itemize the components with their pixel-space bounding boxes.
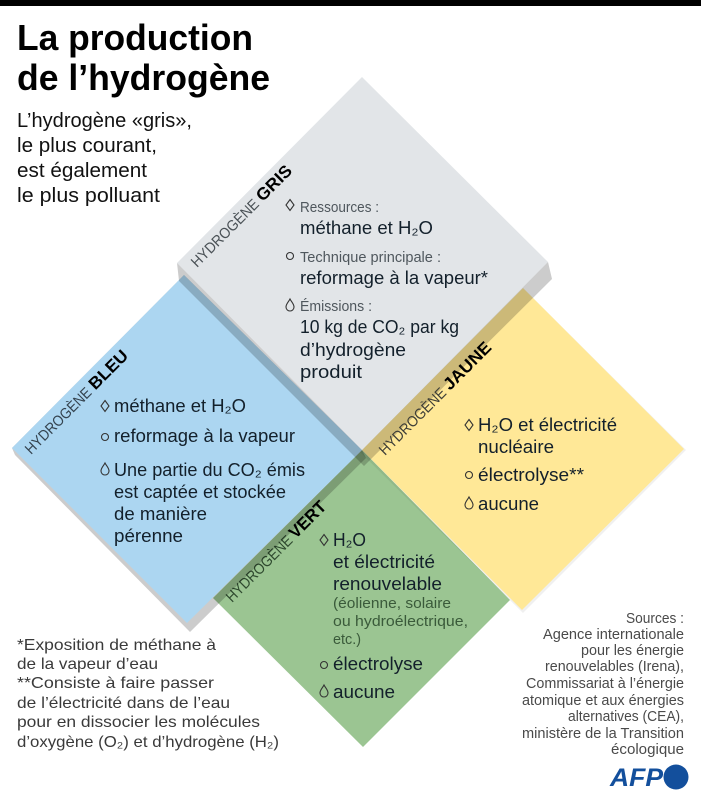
- footnotes: d’oxygène (O₂) et d’hydrogène (H₂): [17, 734, 279, 751]
- footnotes: de l’électricité dans de l’eau: [17, 695, 230, 712]
- green text: électrolyse: [333, 654, 423, 674]
- yellow text: [465, 415, 617, 514]
- AFP logo: AFP: [609, 764, 663, 792]
- yellow heading: HYDROGÈNE: [376, 385, 450, 459]
- top black bar: [0, 0, 701, 6]
- sources: pour les énergie: [581, 642, 684, 659]
- sources: écologique: [611, 741, 684, 758]
- blue text: méthane et H₂O: [114, 396, 246, 416]
- panel: hydrogène bleu: [12, 275, 366, 632]
- blue text: est captée et stockée: [114, 482, 286, 502]
- AFP logo: [609, 764, 688, 792]
- footnotes: pour en dissocier les molécules: [17, 714, 260, 731]
- yellow text: aucune: [478, 494, 539, 514]
- blue text: pérenne: [114, 526, 183, 546]
- subtitle: [17, 110, 192, 207]
- title: La production: [17, 17, 253, 58]
- grey text: Ressources :: [300, 199, 379, 216]
- grey text: reformage à la vapeur*: [300, 268, 488, 288]
- green text: ou hydroélectrique,: [333, 613, 468, 630]
- green text: aucune: [333, 682, 395, 702]
- yellow text: nucléaire: [478, 437, 554, 457]
- panel: hydrogène jaune: [360, 288, 686, 613]
- grey text: Émissions :: [300, 298, 372, 315]
- panel: hydrogène vert: [213, 450, 510, 747]
- panel: hydrogène gris: [177, 77, 552, 466]
- footnotes: [17, 637, 279, 751]
- blue diamond: [12, 275, 362, 623]
- blue heading: [20, 346, 132, 458]
- yellow heading: [374, 338, 495, 459]
- footnotes: *Exposition de méthane à: [17, 637, 216, 654]
- green heading: VERT: [285, 497, 331, 542]
- yellow diamond shadow: [360, 288, 686, 613]
- footnotes: de la vapeur d’eau: [17, 656, 158, 673]
- grey text: 10 kg de CO₂ par kg: [300, 317, 459, 337]
- sources: [522, 610, 684, 758]
- green heading: HYDROGÈNE: [223, 532, 296, 606]
- sources: ministère de la Transition: [522, 725, 684, 742]
- blue heading: BLEU: [85, 346, 132, 393]
- yellow heading: JAUNE: [439, 338, 495, 394]
- yellow text: H₂O et électricité: [478, 415, 617, 435]
- green heading: [221, 497, 331, 606]
- sources: Agence internationale: [543, 626, 684, 643]
- green text: renouvelable: [333, 574, 442, 594]
- yellow diamond: [362, 288, 684, 610]
- grey text: méthane et H₂O: [300, 218, 433, 238]
- green text: [320, 530, 468, 702]
- grey heading: GRIS: [252, 161, 296, 205]
- blue text: de manière: [114, 504, 207, 524]
- grey text: [286, 199, 488, 382]
- green text: et électricité: [333, 552, 435, 572]
- title: [17, 17, 270, 98]
- subtitle: est également: [17, 160, 147, 182]
- sources: Commissariat à l’énergie: [526, 675, 684, 692]
- grey text: produit: [300, 362, 362, 382]
- subtitle: L’hydrogène «gris»,: [17, 110, 192, 132]
- blue text: reformage à la vapeur: [114, 426, 295, 446]
- subtitle: le plus courant,: [17, 135, 157, 157]
- title: de l’hydrogène: [17, 57, 270, 98]
- green text: H₂O: [333, 530, 366, 550]
- subtitle: le plus polluant: [17, 185, 160, 207]
- blue heading: HYDROGÈNE: [22, 384, 95, 458]
- blue text: Une partie du CO₂ émis: [114, 460, 305, 480]
- grey heading: [186, 161, 296, 271]
- sources: alternatives (CEA),: [568, 708, 684, 725]
- sources: renouvelables (Irena),: [545, 658, 684, 675]
- yellow text: électrolyse**: [478, 465, 584, 485]
- blue diamond shadow: [12, 275, 366, 632]
- green text: etc.): [333, 631, 361, 648]
- sources: Sources :: [626, 610, 684, 627]
- grey text: Technique principale :: [300, 249, 441, 266]
- green text: (éolienne, solaire: [333, 595, 451, 612]
- green diamond: [213, 450, 510, 747]
- blue text: [101, 396, 305, 546]
- grey diamond: [177, 77, 548, 450]
- grey text: d’hydrogène: [300, 340, 406, 360]
- grey diamond shadow: [177, 262, 552, 466]
- footnotes: **Consiste à faire passer: [17, 675, 215, 692]
- sources: atomique et aux énergies: [522, 692, 684, 709]
- grey heading: HYDROGÈNE: [188, 196, 263, 271]
